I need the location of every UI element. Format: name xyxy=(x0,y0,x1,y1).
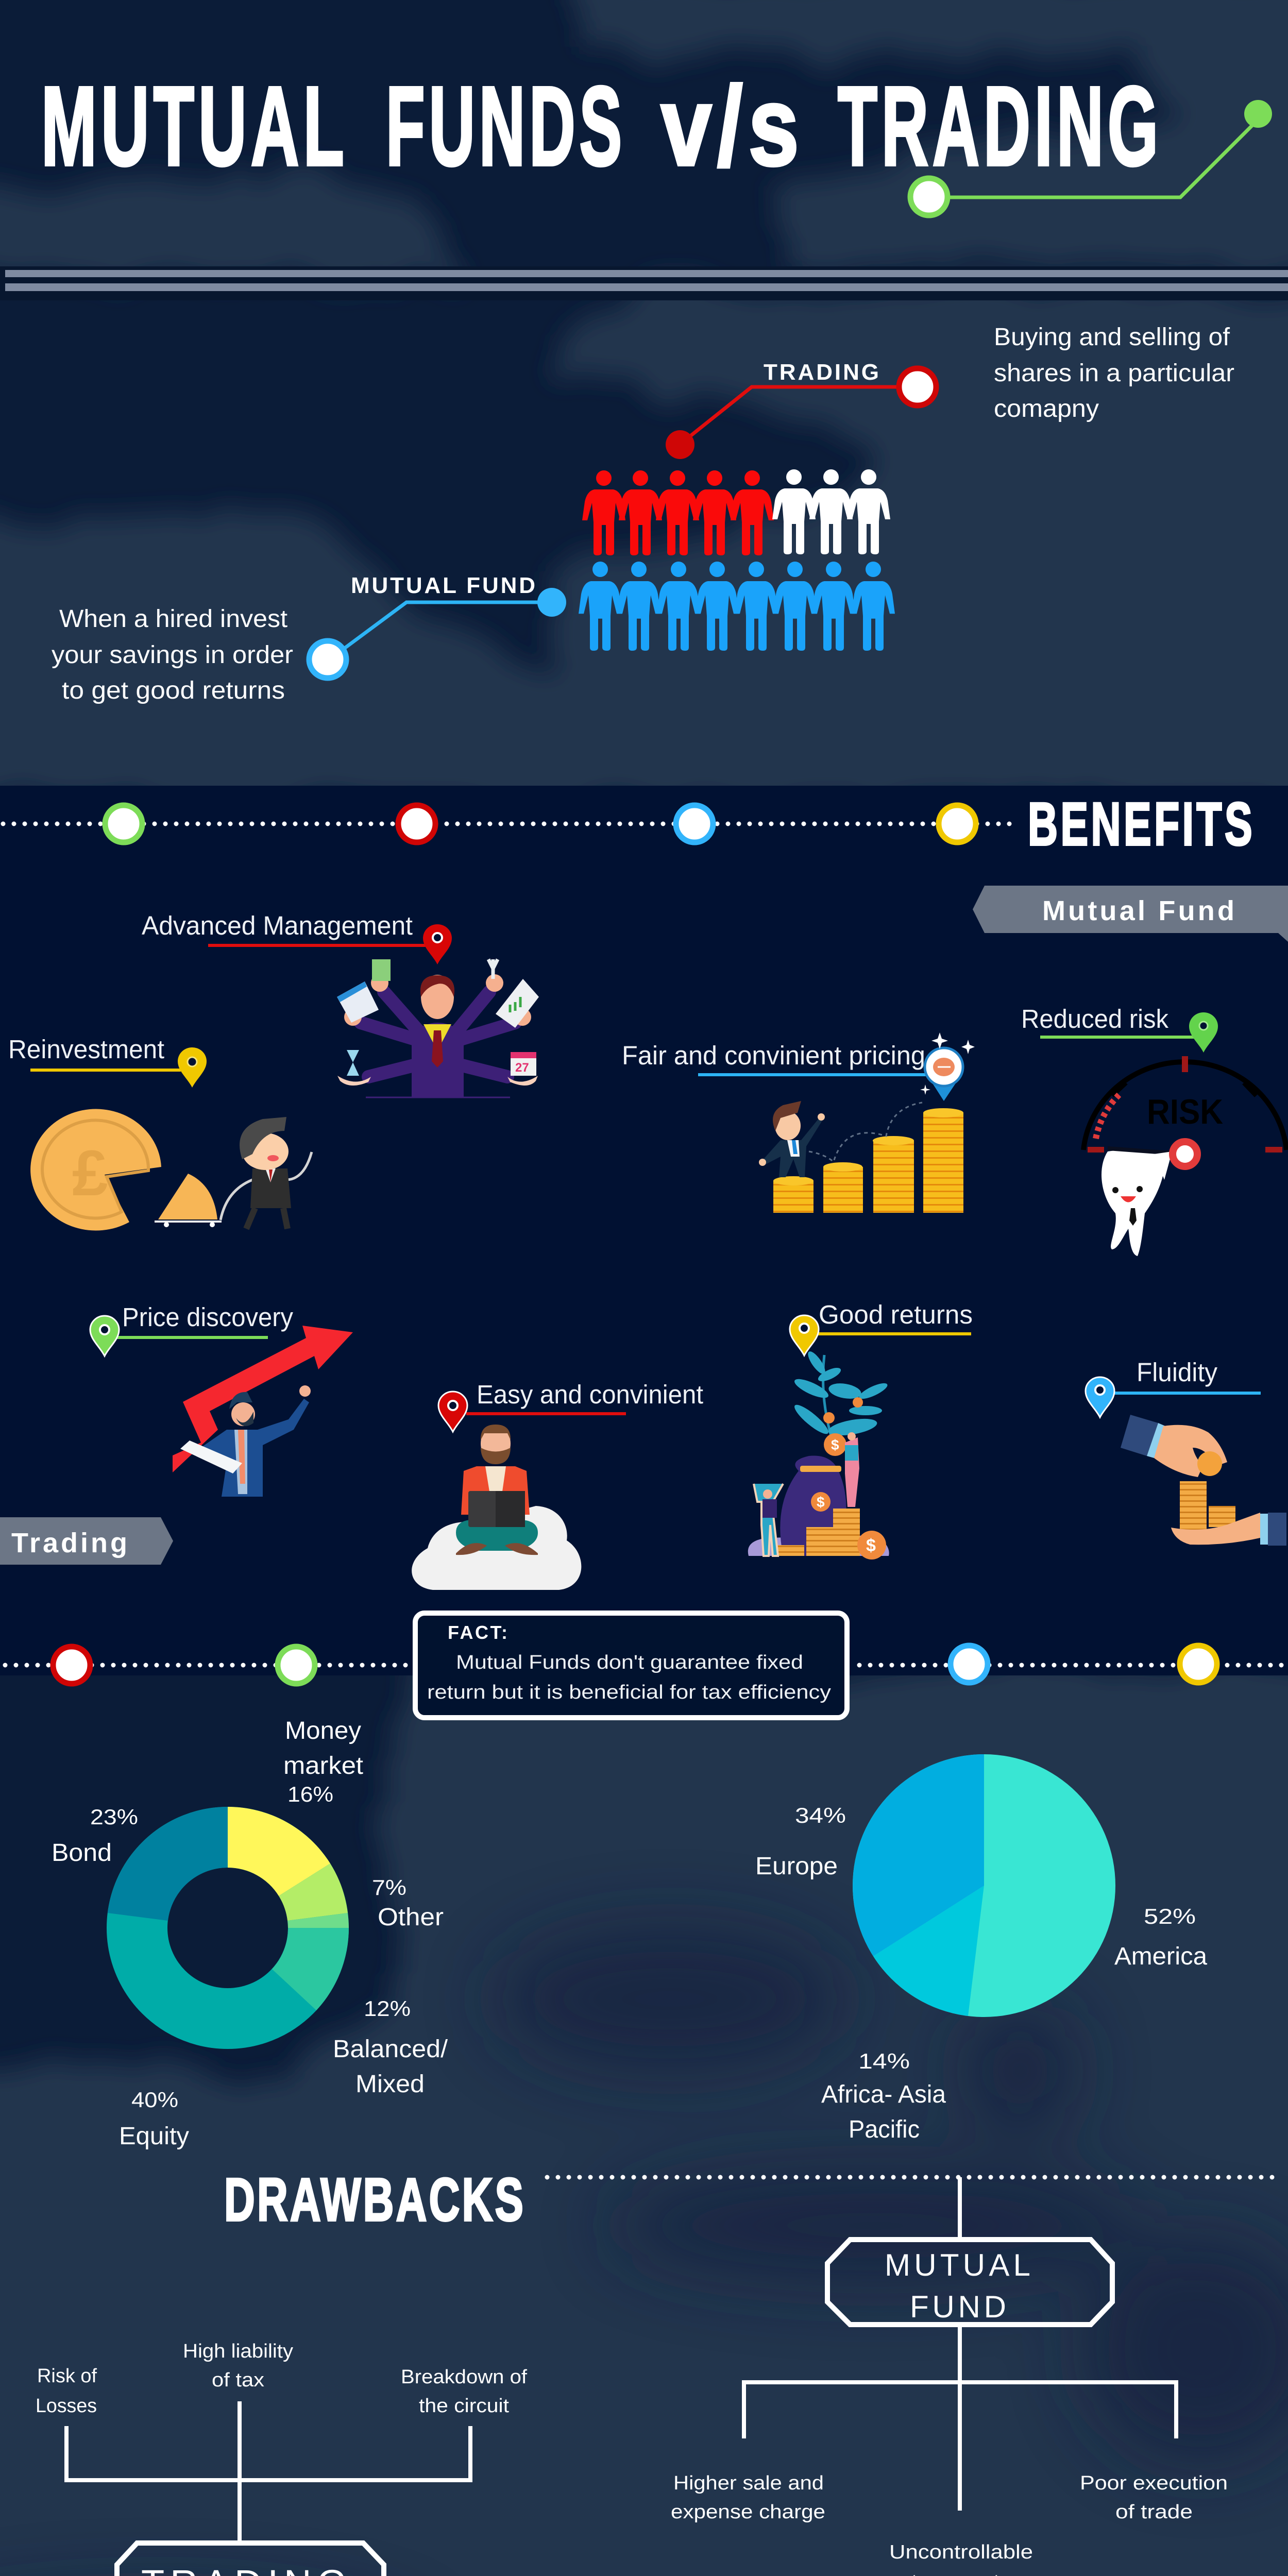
mutual fund definition: to get good returns xyxy=(62,677,285,704)
green title connector xyxy=(910,100,1272,215)
trading drawback labels: the circuit xyxy=(419,2395,509,2417)
trading definition: Buying and selling of xyxy=(994,324,1230,351)
mutual fund box: MUTUAL xyxy=(885,2248,1030,2282)
mutual fund drawback labels: expense charge xyxy=(671,2501,825,2523)
benefit: easy and convinient: Easy and convinient xyxy=(477,1380,703,1409)
tag: mutual fund xyxy=(973,886,1288,942)
mutual fund drawback labels xyxy=(671,2472,1228,2576)
icon: coin with wedge xyxy=(30,1109,222,1231)
trading definition xyxy=(994,324,1234,422)
trading drawback labels: Breakdown of xyxy=(401,2366,527,2388)
trading callout xyxy=(666,360,936,459)
donut labels: 12% xyxy=(364,1996,411,2021)
icon: risk gauge: RISK xyxy=(1147,1092,1223,1131)
trading drawback labels: Losses xyxy=(36,2395,97,2417)
donut labels: Bond xyxy=(52,1839,112,1867)
second rule xyxy=(5,1646,1285,1684)
icon: presenter xyxy=(180,1385,311,1497)
benefit: price discovery xyxy=(90,1302,353,1497)
mutual fund callout xyxy=(309,573,566,678)
pie labels: 14% xyxy=(858,2049,910,2073)
icon: red rising arrow xyxy=(173,1326,353,1472)
pie labels: Europe xyxy=(755,1853,838,1880)
icon: money plant and bag: $ xyxy=(817,1494,825,1510)
pie labels xyxy=(755,1803,1207,2143)
icon: money plant and bag: $ xyxy=(831,1437,839,1453)
icon: businessman on stack xyxy=(759,1101,825,1177)
donut labels xyxy=(52,1717,448,2150)
benefit: fair and convinient pricing xyxy=(622,1032,975,1213)
benefit: advanced management xyxy=(142,911,539,1097)
benefit: reduced risk: Reduced risk xyxy=(1021,1004,1168,1033)
donut labels: market xyxy=(283,1752,363,1780)
benefit: fluidity: Fluidity xyxy=(1137,1358,1217,1387)
mutual fund drawback labels: of trade xyxy=(1115,2501,1193,2523)
mutual fund definition xyxy=(52,605,293,704)
benefit: fair and convinient pricing: Fair and convinient pricing xyxy=(622,1041,925,1070)
pie labels: 52% xyxy=(1144,1904,1196,1928)
pie labels: 34% xyxy=(795,1803,846,1827)
trading box xyxy=(117,2543,384,2576)
icon: money plant and bag xyxy=(748,1349,889,1560)
drawbacks heading: DRAWBACKS xyxy=(224,2166,526,2234)
icon: mascot lifting needle xyxy=(1101,1142,1197,1256)
title: MUTUAL xyxy=(41,64,348,189)
benefit: advanced management: Advanced Management xyxy=(142,911,413,940)
panel: definitions xyxy=(52,324,1234,704)
pie chart: regions xyxy=(853,1754,1115,2017)
icon: yellow pin xyxy=(178,1047,207,1088)
title xyxy=(41,64,1162,189)
benefit: fluidity xyxy=(1086,1358,1286,1546)
donut labels: Other xyxy=(378,1904,444,1931)
benefits header rule xyxy=(3,805,1010,842)
mutual fund box: FUND xyxy=(910,2290,1006,2324)
pie labels: America xyxy=(1114,1943,1207,1970)
donut labels: Mixed xyxy=(355,2071,425,2098)
donut chart: fund types xyxy=(108,1807,349,2019)
mutual fund drawbacks tree xyxy=(547,2177,1278,2576)
people pictogram: trading xyxy=(582,469,890,555)
icon: hands with coins xyxy=(1121,1415,1286,1546)
icon: red pin xyxy=(423,924,452,964)
benefit: good returns: Good returns xyxy=(819,1300,973,1329)
icon: red pin xyxy=(438,1392,467,1432)
icon: blue map pin with target xyxy=(920,1032,975,1101)
trading definition: comapny xyxy=(994,395,1099,422)
tag: mutual fund: Mutual Fund xyxy=(1042,895,1234,926)
trading definition: shares in a particular xyxy=(994,360,1234,387)
benefit: reduced risk xyxy=(1021,1004,1286,1256)
icon: green pin xyxy=(90,1316,119,1356)
icon: green pin xyxy=(1189,1012,1218,1053)
title: v/s xyxy=(661,64,805,189)
trading drawbacks tree xyxy=(3,2341,527,2576)
title: FUNDS xyxy=(386,64,626,189)
trading drawback labels: High liability xyxy=(183,2341,293,2362)
donut labels: Balanced/ xyxy=(333,2036,448,2063)
mutual fund drawback labels: Higher sale and xyxy=(673,2472,824,2494)
mutual fund box xyxy=(827,2240,1112,2325)
trading drawback labels xyxy=(36,2341,527,2417)
icon: blue pin xyxy=(1086,1377,1114,1417)
icon: coin stacks xyxy=(773,1103,963,1213)
donut labels: Money xyxy=(285,1717,361,1744)
trading callout: TRADING xyxy=(764,360,879,385)
benefit: reinvestment: Reinvestment xyxy=(8,1035,164,1064)
pie labels: Pacific xyxy=(849,2116,920,2143)
tag: trading xyxy=(0,1517,173,1565)
mutual fund definition: When a hired invest xyxy=(59,605,287,633)
icon: money plant and bag: $ xyxy=(866,1536,876,1555)
icon: businessman pulling xyxy=(221,1117,312,1229)
trading drawback labels: of tax xyxy=(212,2369,264,2391)
fact callout: FACT: xyxy=(448,1622,507,1643)
benefit: good returns xyxy=(748,1300,973,1560)
mutual fund drawback labels: Uncontrollable xyxy=(889,2541,1033,2563)
donut labels: 23% xyxy=(90,1805,138,1829)
icon: multitasking manager xyxy=(337,959,539,1097)
benefit: easy and convinient xyxy=(412,1380,703,1590)
donut labels: 16% xyxy=(287,1782,333,1806)
icon: yellow pin xyxy=(790,1315,819,1355)
fact callout: return but it is beneficial for tax efficiency xyxy=(427,1682,831,1703)
icon: risk gauge xyxy=(1083,1056,1286,1153)
pie labels: Africa- Asia xyxy=(821,2081,946,2108)
icon: person on cloud with laptop xyxy=(412,1425,581,1590)
fact callout xyxy=(415,1613,847,1718)
mutual fund definition: your savings in order xyxy=(52,641,293,669)
mutual fund callout: MUTUAL FUND xyxy=(351,573,535,598)
mutual fund drawback labels: Poor execution xyxy=(1080,2472,1228,2494)
benefit: reinvestment xyxy=(8,1035,312,1231)
people pictogram: mutual fund xyxy=(579,562,895,651)
donut labels: Equity xyxy=(119,2123,189,2150)
benefit: price discovery: Price discovery xyxy=(122,1302,293,1332)
donut labels: 40% xyxy=(131,2088,178,2112)
tag: trading: Trading xyxy=(11,1528,127,1558)
double divider bars xyxy=(5,270,1288,291)
fact callout: Mutual Funds don't guarantee fixed xyxy=(456,1652,803,1673)
trading drawback labels: Risk of xyxy=(37,2365,97,2387)
icon: multitasking manager: 27 xyxy=(515,1061,529,1075)
icon: coin with wedge: £ xyxy=(72,1138,108,1209)
donut labels: 7% xyxy=(372,1875,406,1900)
